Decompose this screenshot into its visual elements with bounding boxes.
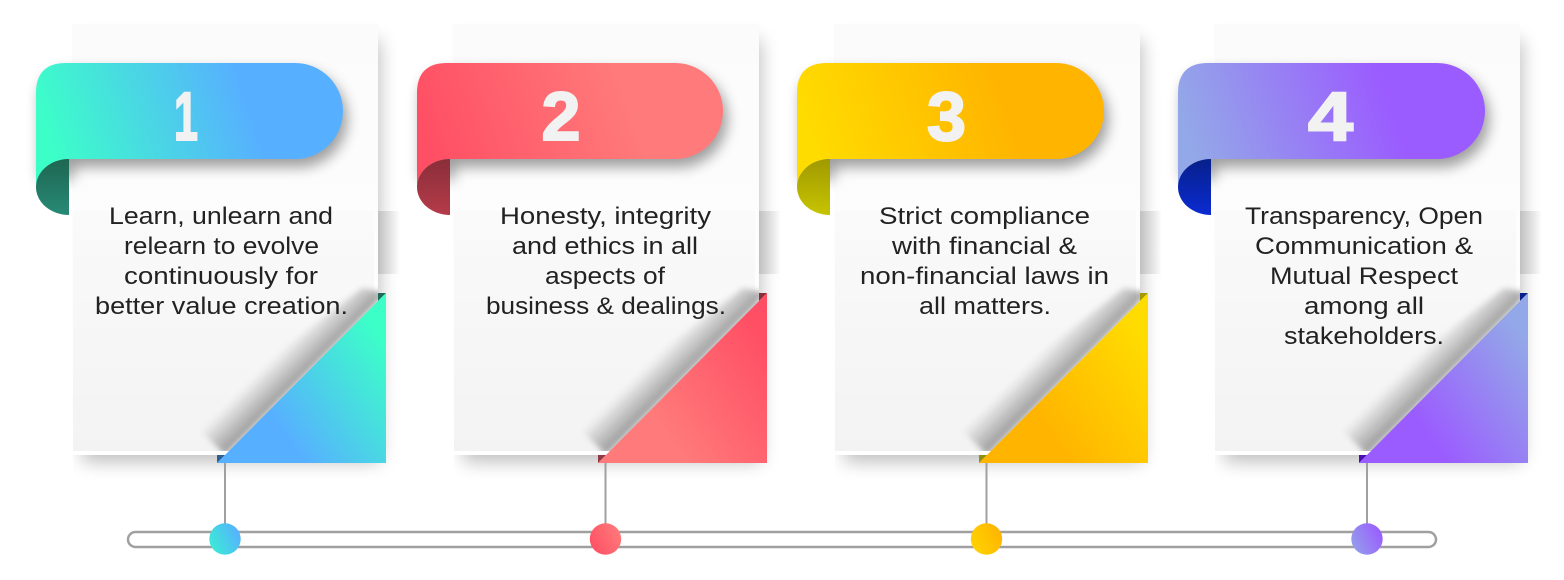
ribbon 1 <box>36 63 347 215</box>
text: card 2 description <box>486 203 726 320</box>
panel: card 4 <box>1178 24 1542 463</box>
text: card 4 description: stakeholders. <box>1284 323 1444 350</box>
text: card 2 description: and ethics in all <box>512 233 698 260</box>
text: card 3 description: all matters. <box>919 293 1051 320</box>
ribbon 1: 1 <box>174 78 198 155</box>
ribbon 4: 4 <box>1308 78 1353 155</box>
text: card 1 description <box>95 203 348 320</box>
connector 4 <box>1366 463 1368 530</box>
text: card 4 description: Communication & <box>1255 233 1473 260</box>
timeline dot 4 <box>1351 523 1383 555</box>
text: card 4 description: Mutual Respect <box>1270 263 1458 290</box>
connector 1 <box>224 463 226 530</box>
text: card 1 description: relearn to evolve <box>124 233 319 260</box>
ribbon 2 <box>417 63 727 215</box>
timeline dot 1 <box>209 523 241 555</box>
folded corner 4 <box>1359 293 1528 463</box>
folded corner 1 <box>217 293 386 463</box>
timeline bar <box>128 532 1436 547</box>
connector 3 <box>986 463 988 530</box>
text: card 3 description: with financial & <box>891 233 1077 260</box>
text: card 2 description: Honesty, integrity <box>500 203 711 230</box>
text: card 3 description: non-financial laws in <box>860 263 1109 290</box>
folded corner 3 <box>979 293 1148 463</box>
ribbon 3: 3 <box>927 78 966 155</box>
panel: card 3 <box>797 24 1162 463</box>
text: card 3 description <box>860 203 1109 320</box>
text: card 4 description: Transparency, Open <box>1245 203 1483 230</box>
text: card 1 description: better value creation. <box>95 293 348 320</box>
text: card 4 description: among all <box>1304 293 1424 320</box>
timeline dot 2 <box>590 523 621 555</box>
text: card 2 description: aspects of <box>545 263 665 290</box>
text: card 3 description: Strict compliance <box>879 203 1090 230</box>
text: card 4 description <box>1245 203 1483 350</box>
ribbon 4 <box>1178 63 1489 215</box>
panel: card 1 <box>36 24 400 463</box>
folded corner 2 <box>598 293 767 463</box>
text: card 1 description: Learn, unlearn and <box>109 203 333 230</box>
connector 2 <box>604 463 606 530</box>
text: card 2 description: business & dealings. <box>486 293 726 320</box>
ribbon 3 <box>797 63 1108 215</box>
timeline dot 3 <box>971 523 1002 555</box>
text: card 1 description: continuously for <box>124 263 318 290</box>
ribbon 2: 2 <box>542 78 580 155</box>
panel: card 2 <box>417 24 781 463</box>
